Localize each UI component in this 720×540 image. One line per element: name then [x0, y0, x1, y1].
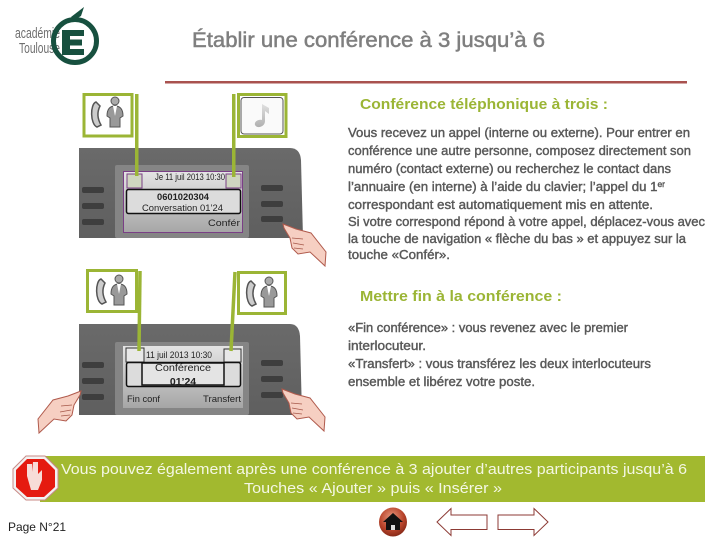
- panel: phone in conference: [79, 324, 302, 415]
- icon: hold music box: [238, 94, 286, 136]
- icon: call box left: [84, 94, 132, 136]
- screen bezel: [115, 165, 249, 238]
- callout banner: Touches « Ajouter » puis « Insérer »: [244, 480, 502, 497]
- screen: [123, 346, 243, 408]
- screen: [124, 172, 242, 232]
- text block: conférence à trois: correspondant est automatiquement mis en attente.: [348, 198, 653, 212]
- text block: mettre fin: [348, 321, 651, 389]
- text block: mettre fin: ensemble et libérez votre poste.: [348, 375, 535, 389]
- logo: académie de Toulouse: [15, 7, 96, 62]
- panel: phone in conference: Transfert: [203, 394, 241, 405]
- icon: call box 2 left: [88, 270, 136, 312]
- callout banner: [40, 456, 705, 502]
- text block: mettre fin: interlocuteur.: [348, 339, 426, 353]
- icon: pointing hand: [283, 224, 326, 266]
- side keys: [82, 185, 283, 225]
- call box: [126, 362, 240, 386]
- icon: call box 2 right: [238, 272, 286, 314]
- screen date: 11 juil 2013 10:30: [146, 350, 212, 360]
- text block: conférence à trois: la touche de navigation « flèche du bas » et appuyez sur la: [348, 232, 686, 246]
- panel: phone in conference: Conférence: [155, 362, 211, 374]
- text block: conférence à trois: Si votre correspond répond à votre appel, déplacez-vous avec: [348, 215, 705, 229]
- phone body: [79, 148, 303, 238]
- call tabs: [126, 348, 144, 362]
- connector left: [135, 94, 138, 176]
- screen bezel: [115, 342, 249, 415]
- panel: phone with conference start: Conversation 01’24: [142, 203, 223, 214]
- icon: pointing hand right: [282, 389, 325, 431]
- text block: mettre fin: «Fin conférence» : vous revenez avec le premier: [348, 321, 628, 335]
- screen date: Je 11 juil 2013 10:30: [155, 172, 225, 182]
- softkey label: Confér: [208, 218, 240, 229]
- panel: phone in conference: 01’24: [170, 376, 196, 388]
- arrow: previous: [437, 508, 487, 536]
- phone body: [79, 324, 302, 415]
- text block: conférence à trois: numéro (contact externe) ou recherchez le contact dans: [348, 162, 671, 176]
- text block: conférence à trois: [348, 126, 705, 262]
- call box: [126, 190, 240, 214]
- icon: pointing hand left: [38, 391, 81, 433]
- page number: Page N°21: [8, 520, 66, 534]
- text block: conférence à trois: er: [657, 180, 665, 189]
- softkey labels: Fin conf: [127, 394, 160, 405]
- logo: académie de Toulouse: Toulouse: [19, 40, 60, 57]
- logo: académie de Toulouse: académie: [15, 25, 60, 42]
- icon: home button: [379, 508, 407, 536]
- text block: conférence à trois: touche «Confér».: [348, 248, 450, 262]
- connector right 2: [231, 272, 235, 351]
- callout banner: Vous pouvez également après une conférence à 3 ajouter d’autres participants jusqu’à 6: [61, 461, 687, 478]
- connector right: [232, 94, 236, 177]
- heading: mettre fin: Mettre fin à la conférence :: [360, 289, 562, 305]
- panel: phone with conference start: [79, 148, 303, 238]
- heading: conférence à trois: Conférence téléphonique à trois :: [360, 97, 608, 113]
- title rule: [165, 81, 687, 84]
- side keys: [82, 360, 283, 400]
- panel: phone with conference start: 0601020304: [157, 192, 210, 203]
- arrow: next: [498, 508, 548, 536]
- text block: conférence à trois: l’annuaire (en interne) à l’aide du clavier; l’appel du 1: [348, 180, 641, 194]
- text block: conférence à trois: conférence une autre personne, composez directement son: [348, 144, 691, 158]
- title: Établir une conférence à 3 jusqu’à 6: [192, 29, 545, 52]
- text block: conférence à trois: Vous recevez un appel (interne ou externe). Pour entrer en: [348, 126, 690, 140]
- connector left 2: [139, 271, 140, 351]
- call tabs: [127, 174, 142, 188]
- text block: mettre fin: «Transfert» : vous transférez les deux interlocuteurs: [348, 357, 651, 371]
- icon: stop sign: [13, 456, 58, 500]
